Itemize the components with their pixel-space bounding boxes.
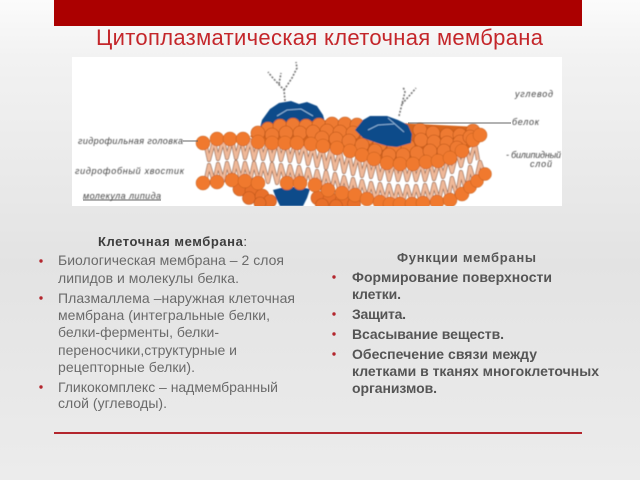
panel: membrane functions text — [332, 250, 599, 396]
label: hydrophilic head: гидрофильная головка — [78, 136, 183, 146]
icon: bottom membrane protein — [273, 187, 310, 206]
text: biological membrane: Биологическая мембрана – 2 слоя — [58, 252, 284, 268]
lipid heads: top leaflet front row — [196, 128, 487, 171]
icon: small membrane protein — [355, 116, 412, 147]
text: plasmalemma: рецепторные белки). — [58, 359, 195, 375]
text: glycocalyx: Гликокомплекс – надмембранный — [58, 379, 278, 395]
text: plasmalemma: Плазмаллема –наружная клеточная — [58, 290, 295, 306]
icon: carbohydrate chain on small protein — [399, 87, 416, 116]
diagram labels — [75, 89, 561, 201]
text: absorption: Всасывание веществ. — [352, 326, 504, 342]
icon: large membrane protein — [260, 100, 325, 127]
text: biological membrane — [58, 252, 284, 286]
label: lipid bilayer second line: слой — [530, 159, 552, 169]
heading: membrane functions: Функции мембраны — [397, 250, 536, 265]
bullet markers — [39, 259, 43, 389]
text: protection: Защита. — [352, 306, 406, 322]
text: intercellular connection: организмов. — [352, 380, 437, 396]
lipid tails — [205, 139, 484, 202]
text: surface formation: клетки. — [352, 286, 401, 302]
label: lipid bilayer: - билипидный — [506, 150, 561, 160]
label: protein: белок — [512, 117, 540, 127]
text: surface formation: Формирование поверхности — [352, 269, 552, 285]
banner — [54, 0, 582, 26]
heading: cell membrane: Клеточная мембрана: — [98, 234, 247, 249]
text: biological membrane: липидов и молекулы белка. — [58, 270, 239, 286]
text: intercellular connection — [352, 346, 599, 396]
panel: cell membrane text — [39, 234, 295, 411]
text: plasmalemma — [58, 290, 295, 375]
text: plasmalemma: переносчики,структурные и — [58, 342, 237, 358]
label: carbohydrate: углевод — [514, 89, 553, 99]
lipid heads: bottom leaflet front row — [196, 168, 492, 211]
label: lipid molecule: молекула липида — [83, 191, 161, 201]
label: hydrophobic tail: гидрофобный хвостик — [75, 166, 185, 176]
callout lines — [83, 123, 511, 200]
text: glycocalyx: слой (углеводы). — [58, 395, 167, 411]
bottom rule — [54, 432, 582, 434]
lipid heads: top leaflet surface — [250, 117, 484, 166]
title: Цитоплазматическая клеточная мембрана — [96, 25, 544, 50]
text: plasmalemma: белки-ферменты, белки- — [58, 324, 219, 340]
lipid heads: bottom leaflet back rows — [232, 183, 362, 206]
text: intercellular connection: клетками в тканях многоклеточных — [352, 363, 599, 379]
membrane diagram — [72, 57, 562, 212]
bullet markers — [332, 275, 336, 356]
text: intercellular connection: Обеспечение связи между — [352, 346, 537, 362]
text: surface formation — [352, 269, 552, 302]
text: plasmalemma: мембрана (интегральные белки, — [58, 307, 270, 323]
icon: carbohydrate chain on large protein — [268, 62, 297, 101]
text: glycocalyx — [58, 379, 278, 411]
